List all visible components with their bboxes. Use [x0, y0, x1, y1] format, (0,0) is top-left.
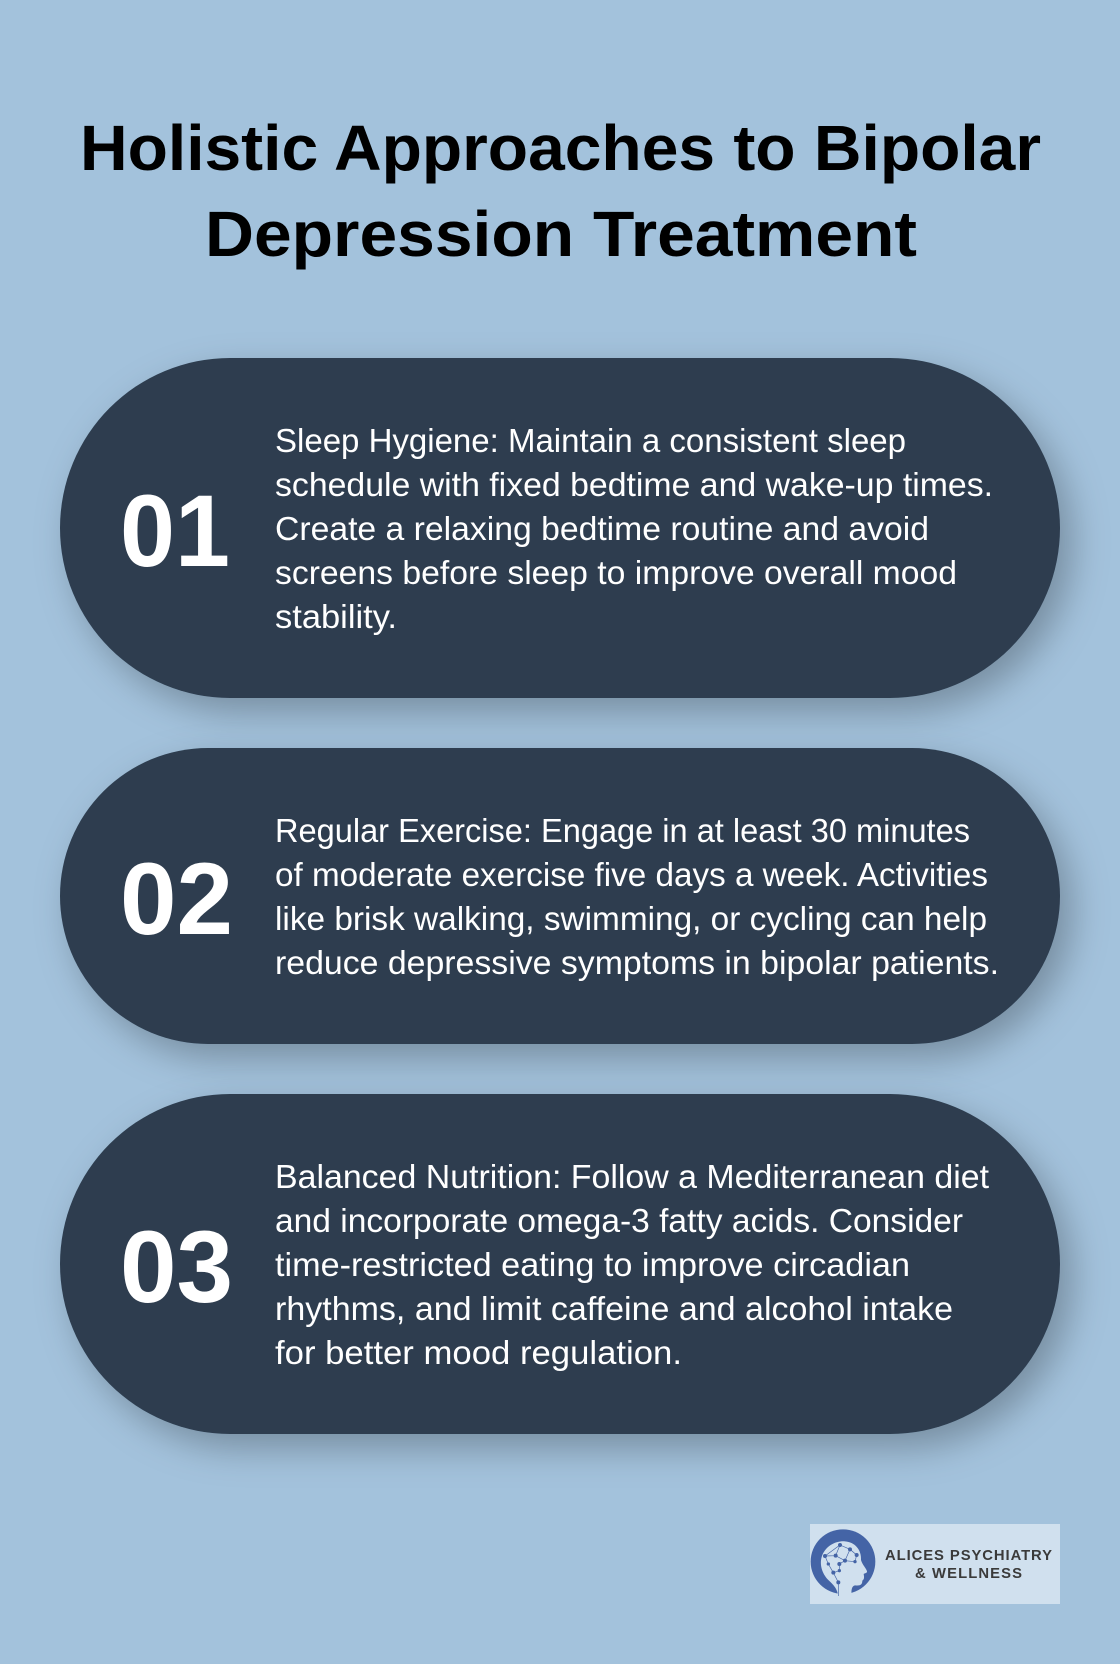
logo wordmark: & WELLNESS [915, 1566, 1022, 1582]
number 03: 03 [120, 1210, 233, 1324]
text block: sleep hygiene: stability. [275, 598, 397, 635]
text block: regular exercise: Regular Exercise: Engage in at least 30 minutes [275, 812, 970, 849]
text block: balanced nutrition: and incorporate omega-3 fatty acids. Consider [275, 1202, 963, 1239]
title: Depression Treatment [205, 198, 917, 270]
text block: regular exercise: like brisk walking, swimming, or cycling can help [275, 900, 987, 937]
panel: step 01 sleep hygiene [60, 358, 1060, 698]
text block: sleep hygiene [275, 422, 993, 635]
icon: head with brain network [811, 1529, 875, 1597]
text block: regular exercise [275, 812, 999, 981]
logo wordmark: ALICES PSYCHIATRY [885, 1548, 1052, 1564]
text block: balanced nutrition: Balanced Nutrition: Follow a Mediterranean diet [275, 1158, 989, 1195]
text block: balanced nutrition [275, 1158, 989, 1371]
text block: sleep hygiene: screens before sleep to improve overall mood [275, 554, 957, 591]
text block: balanced nutrition: for better mood regulation. [275, 1334, 682, 1371]
text block: sleep hygiene: Sleep Hygiene: Maintain a consistent sleep [275, 422, 906, 459]
text block: regular exercise: of moderate exercise five days a week. Activities [275, 856, 988, 893]
text block: regular exercise: reduce depressive symptoms in bipolar patients. [275, 944, 999, 981]
logo wordmark [885, 1548, 1052, 1582]
number 01: 01 [120, 474, 230, 588]
title [80, 112, 1041, 270]
number 02: 02 [120, 842, 233, 956]
title: Holistic Approaches to Bipolar [80, 112, 1041, 184]
panel: step 02 regular exercise [60, 748, 1060, 1044]
logo: Alices Psychiatry & Wellness [810, 1524, 1060, 1604]
panel: step 03 balanced nutrition [60, 1094, 1060, 1434]
text block: sleep hygiene: schedule with fixed bedtime and wake-up times. [275, 466, 993, 503]
text block: sleep hygiene: Create a relaxing bedtime routine and avoid [275, 510, 929, 547]
text block: balanced nutrition: time-restricted eating to improve circadian [275, 1246, 910, 1283]
text block: balanced nutrition: rhythms, and limit caffeine and alcohol intake [275, 1290, 953, 1327]
